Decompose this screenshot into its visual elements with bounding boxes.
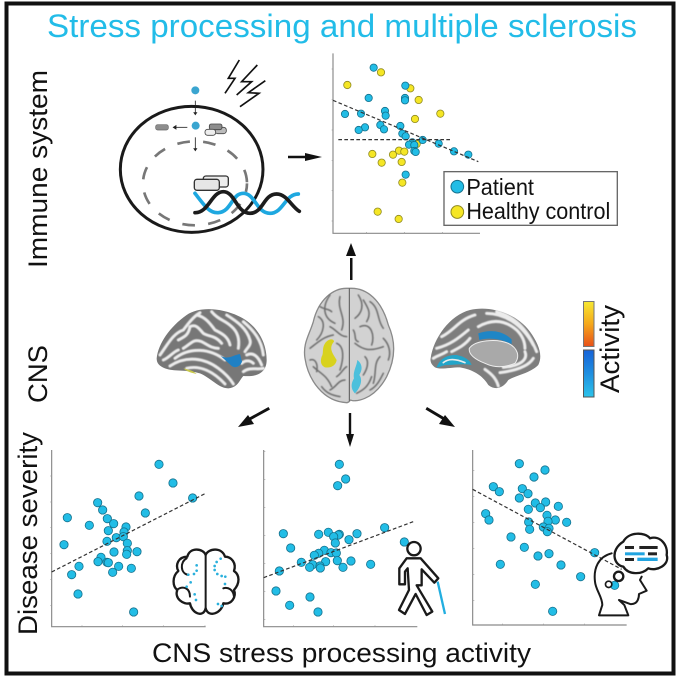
nuclear envelope (143, 141, 247, 225)
colorbar: activity legend (584, 302, 625, 397)
thought colored bars (625, 552, 658, 561)
corpus callosum cut surface (469, 341, 518, 367)
axes (264, 450, 417, 627)
title: Stress processing and multiple sclerosis (47, 8, 637, 44)
row label: CNS: CNS (23, 345, 53, 403)
arrow: cell to scatter (288, 153, 322, 161)
cell membrane (120, 106, 263, 232)
activity: yellow region (321, 339, 337, 368)
stress molecule outside cell (191, 86, 199, 94)
arrow: brain to scatter (346, 243, 356, 280)
activity: cingulate blue (478, 331, 512, 344)
trend line (264, 521, 415, 578)
activity: yellow region (183, 368, 197, 374)
blue points: patients (341, 64, 472, 178)
brain: lateral view (157, 309, 267, 388)
legend: patient: Patient (466, 174, 535, 200)
yellow points: healthy controls (344, 69, 444, 223)
thought text bars (625, 546, 658, 561)
brain: dorsal view (305, 288, 394, 403)
icon: lightning bolts (225, 60, 265, 107)
legend (444, 172, 617, 225)
brain lesion dots (185, 557, 227, 607)
protein complex left (156, 125, 168, 130)
scatter: disease severity left (50, 450, 238, 627)
axes (473, 450, 627, 625)
patient points (272, 460, 408, 616)
DNA helix (195, 192, 299, 213)
trend line (52, 493, 206, 572)
molecule inside cell (192, 122, 200, 130)
icon: walking person with cane (399, 542, 445, 615)
patient points (60, 460, 197, 616)
arrow: to left scatter (238, 407, 270, 427)
colorbar: positive (584, 302, 594, 346)
trend line (473, 489, 622, 569)
activity: blue region (221, 354, 242, 367)
colorbar label: Activity (595, 304, 625, 393)
row label: immune system: Immune system (23, 70, 53, 268)
colorbar: negative (584, 350, 594, 397)
immune cell diagram (120, 60, 299, 232)
patient points (481, 459, 619, 615)
icon: brain outline (174, 550, 238, 614)
activity: cyan region (352, 360, 362, 393)
activity: cyan ventral (437, 355, 472, 367)
scatter: disease severity middle (264, 450, 445, 627)
scatter: disease severity right (473, 450, 667, 625)
arrow: to middle scatter (346, 413, 354, 447)
legend: healthy control: Healthy control (466, 198, 610, 224)
protein complex right (205, 124, 226, 135)
x axis label: CNS stress processing activity (152, 638, 532, 668)
trend lines (333, 100, 478, 162)
transcription factors (194, 176, 228, 190)
brain: medial view (430, 309, 540, 388)
scatter: immune system (332, 53, 617, 233)
arrow: to right scatter (426, 407, 455, 427)
axes (50, 450, 206, 627)
axes (332, 53, 480, 233)
brain renderings (157, 288, 540, 403)
signalling arrows (173, 101, 197, 151)
icon: head with thought cloud (595, 534, 667, 615)
row label: disease severity: Disease severity (13, 431, 43, 635)
